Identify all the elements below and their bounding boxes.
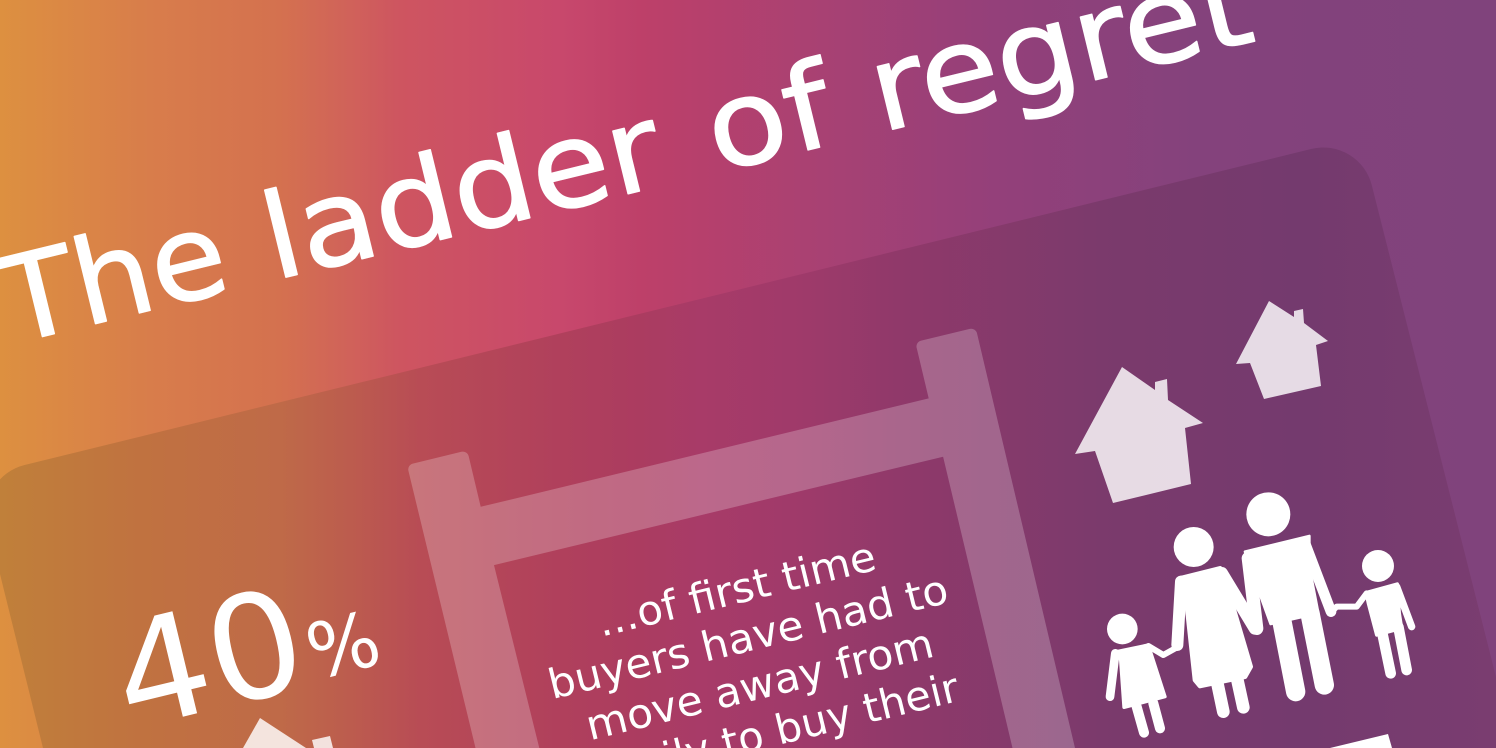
cropped white block at bottom [1330, 734, 1392, 748]
daughter [1107, 614, 1178, 733]
mother [1174, 527, 1255, 712]
description text: move away from [581, 619, 938, 748]
title: of [691, 35, 848, 199]
title: ladder [248, 77, 675, 307]
ladder [408, 329, 1075, 748]
father [1245, 492, 1331, 692]
icon: family [1107, 492, 1412, 733]
description text: buyers have had to [543, 565, 953, 709]
title [0, 0, 1264, 371]
son [1330, 550, 1412, 673]
statistic: 40%: % [298, 594, 389, 697]
description text [532, 518, 976, 748]
statistic: 40% [96, 537, 394, 748]
icon: large house [1075, 367, 1203, 503]
description text: ...of first time [592, 532, 881, 646]
icon: house under statistic [243, 718, 333, 748]
icon: small house [1236, 301, 1328, 399]
